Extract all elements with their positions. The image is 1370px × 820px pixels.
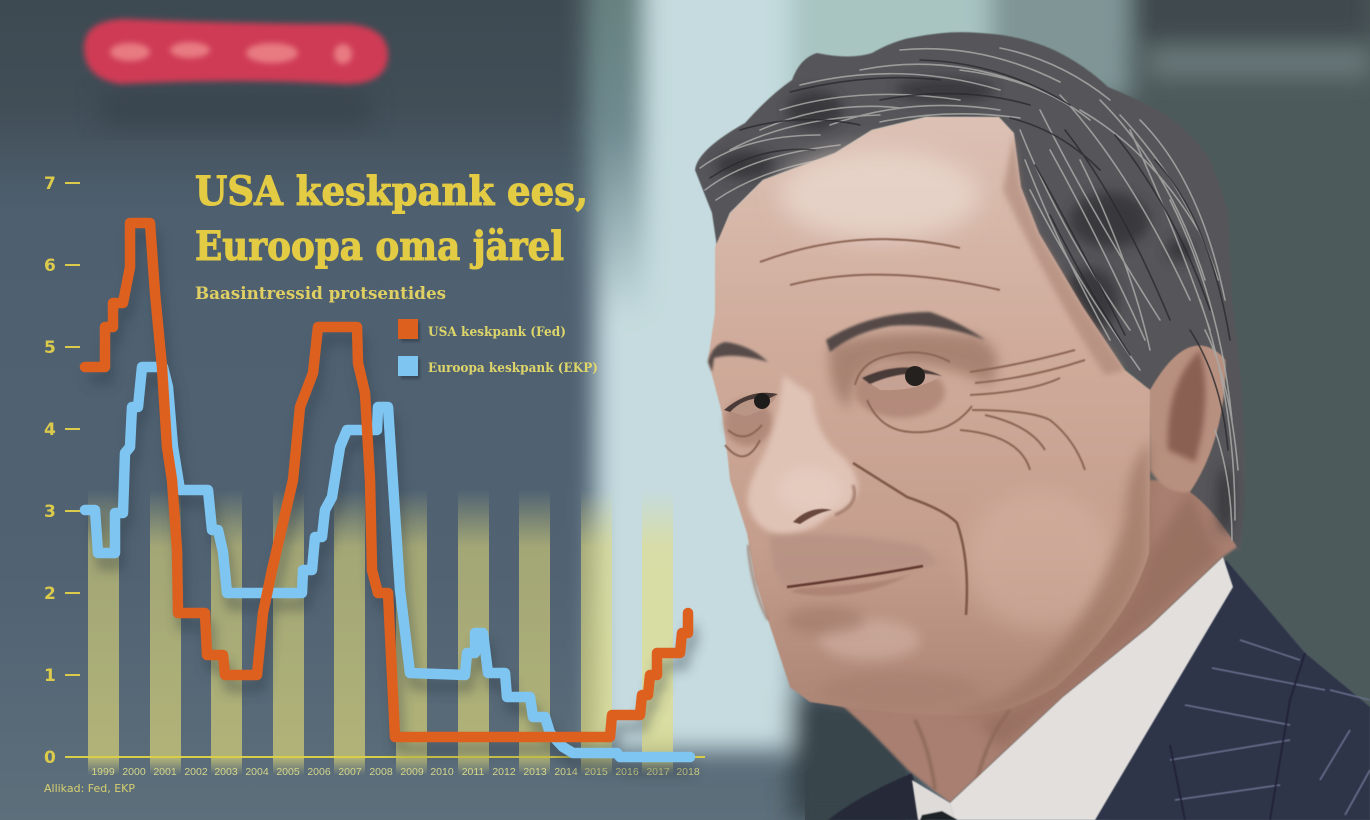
portrait photo [695,32,1370,820]
y axis labels and ticks [44,174,80,768]
legend item: EKP [398,356,598,379]
chin shadow [820,672,980,708]
year labels: 2014 [554,766,578,778]
year labels: 2015 [584,766,608,778]
year labels: 2010 [430,766,454,778]
eye bags and crow's-feet wrinkles [725,239,1085,470]
eye socket shadows [829,332,997,410]
blurred red sign [84,19,388,128]
y axis labels and ticks: 3 [44,502,56,522]
suit jacket [828,560,1370,820]
hair dark patches [715,78,1233,534]
year labels: 2008 [369,766,393,778]
year labels: 2017 [646,766,670,778]
year labels: 2007 [338,766,362,778]
eyebrows [826,312,985,352]
left cheek line [748,545,768,620]
source note: Allikad: Fed, EKP [44,782,135,795]
cheek highlight [965,490,1115,630]
y axis labels and ticks: 0 [44,748,56,768]
neck [790,480,1240,803]
nose [748,375,858,535]
subtitle: Baasintressid protsentides [195,284,446,304]
x axis line [65,756,705,758]
shirt collar [912,557,1233,820]
hair light strands [700,48,1238,540]
y axis labels and ticks: 5 [44,338,56,358]
year labels: 2004 [245,766,269,778]
title: USA keskpank ees, [195,168,588,215]
year labels: 2018 [676,766,700,778]
forehead highlight [780,150,980,240]
bar chart: alternating year bands [88,490,673,775]
y axis labels and ticks: 2 [44,584,56,604]
title [195,168,588,270]
ear [1148,328,1227,492]
y axis labels and ticks: 1 [44,666,56,686]
year labels: 2011 [462,766,484,778]
legend item: Fed: USA keskpank (Fed) [428,325,566,340]
line: USA keskpank (Fed) [85,223,688,737]
year labels: 2013 [523,766,547,778]
y axis labels and ticks: 4 [44,420,56,440]
year labels: 2009 [400,766,424,778]
line: Euroopa keskpank (EKP) [85,367,690,757]
y axis labels and ticks: 7 [44,174,56,194]
year labels: 2000 [122,766,146,778]
legend [398,319,598,379]
year labels: 2003 [214,766,238,778]
year labels: 1999 [91,766,115,778]
year labels: 2001 [153,766,177,778]
title: Euroopa oma järel [195,223,564,270]
under-lip shadow [785,606,865,634]
lower lip [790,574,912,596]
upper lip shade [770,534,936,587]
hair [695,32,1244,552]
year labels [91,766,700,778]
mouth [787,566,923,587]
hair dark strands [710,60,1230,450]
temple shadow [1003,133,1125,375]
year labels: 2005 [276,766,300,778]
eyes [724,366,942,416]
year labels: 2006 [307,766,331,778]
side face shadow [950,440,1150,716]
face [708,117,1150,716]
legend item: EKP: Euroopa keskpank (EKP) [428,361,598,376]
year labels: 2016 [615,766,639,778]
legend item: Fed [398,319,566,342]
line shadows [89,235,694,769]
year labels: 2002 [184,766,208,778]
y axis labels and ticks: 6 [44,256,56,276]
year labels: 2012 [492,766,516,778]
nasolabial fold [853,463,967,615]
